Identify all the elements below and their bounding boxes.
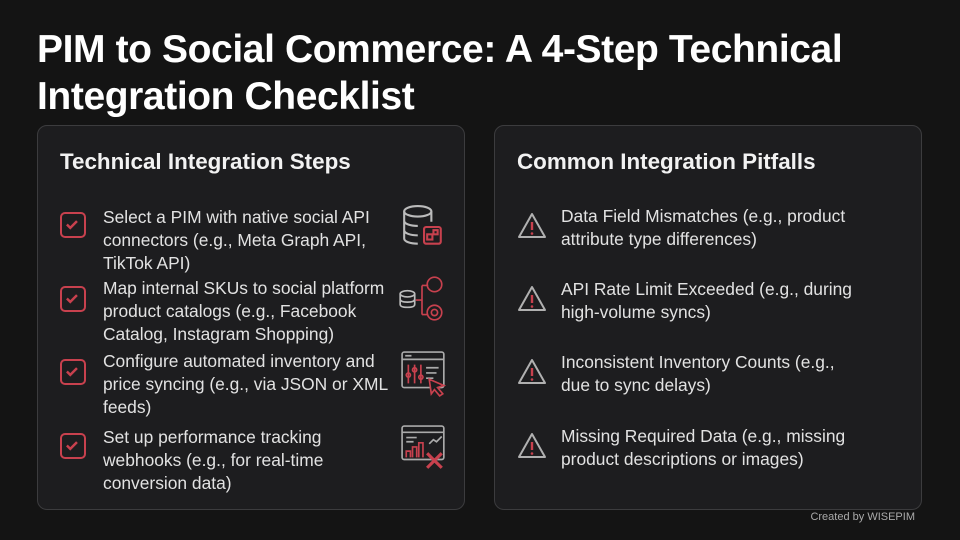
icon: warning bbox=[518, 359, 546, 384]
text: Inconsistent Inventory Counts (e.g., due to sync delays) bbox=[561, 352, 835, 395]
step 1 bbox=[60, 205, 442, 273]
credit: Created by WISEPIM bbox=[810, 511, 915, 523]
panel: technical integration steps bbox=[37, 125, 465, 510]
icon: checkbox bbox=[60, 433, 86, 459]
icon: catalog mapping bbox=[399, 276, 443, 321]
text: Map internal SKUs to social platform product catalogs (e.g., Facebook Catalog, Instagram Shopping) bbox=[103, 278, 384, 344]
icon: checkbox bbox=[60, 286, 86, 312]
title: PIM to Social Commerce: A 4-Step Technical bbox=[37, 28, 842, 71]
text: Select a PIM with native social API connectors (e.g., Meta Graph API, TikTok API) bbox=[103, 207, 370, 273]
pitfall 3 bbox=[518, 352, 835, 395]
icon: sliders window bbox=[401, 351, 446, 397]
icon: checkbox bbox=[60, 359, 86, 385]
panel: common integration pitfalls bbox=[494, 125, 922, 510]
icon: warning bbox=[518, 286, 546, 311]
text: API Rate Limit Exceeded (e.g., during high-volume syncs) bbox=[561, 279, 852, 322]
icon: analytics tools bbox=[401, 425, 445, 469]
title bbox=[37, 28, 842, 118]
text: Configure automated inventory and price syncing (e.g., via JSON or XML feeds) bbox=[103, 351, 387, 417]
step 2 bbox=[60, 276, 443, 344]
icon: warning bbox=[518, 213, 546, 238]
pitfall 4 bbox=[518, 426, 845, 469]
step 3 bbox=[60, 351, 446, 417]
icon: checkbox bbox=[60, 212, 86, 238]
title: Integration Checklist bbox=[37, 75, 414, 118]
icon: warning bbox=[518, 433, 546, 458]
step 4 bbox=[60, 425, 445, 493]
text: Missing Required Data (e.g., missing product descriptions or images) bbox=[561, 426, 845, 469]
pitfall 2 bbox=[518, 279, 852, 322]
text: Set up performance tracking webhooks (e.g., for real-time conversion data) bbox=[103, 427, 323, 493]
text: Data Field Mismatches (e.g., product attribute type differences) bbox=[561, 206, 845, 249]
heading: steps: Technical Integration Steps bbox=[60, 149, 351, 174]
heading: pitfalls: Common Integration Pitfalls bbox=[517, 149, 816, 174]
pitfall 1 bbox=[518, 206, 846, 249]
icon: database bbox=[403, 205, 442, 245]
